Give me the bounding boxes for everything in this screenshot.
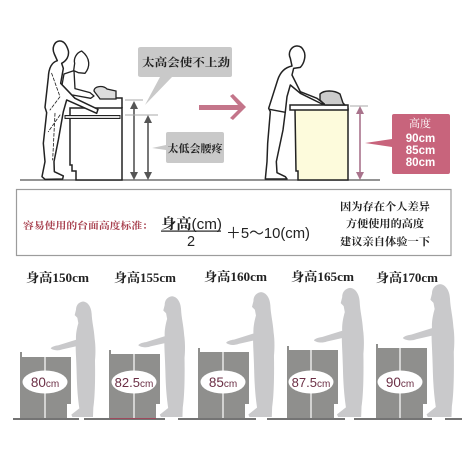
column: 160cm [198, 292, 274, 418]
callout: too low: 太低会腰疼 [168, 142, 223, 155]
column: 155cm [109, 296, 185, 418]
formula: ＋5～10(cm) [226, 225, 310, 242]
height labels: 身高155cm [114, 270, 177, 285]
chart: cabinet and figure comparison [13, 284, 462, 419]
column: 150cm: 80cm [31, 375, 59, 390]
formula: 2 [187, 234, 195, 250]
formula label: 容易使用的台面高度标准： [23, 220, 153, 232]
height labels: 身高160cm [204, 269, 268, 284]
callout: too high [138, 47, 232, 105]
column: 155cm: 82.5cm [115, 375, 153, 390]
figure: person at correct height [265, 46, 324, 179]
arrow: counter height dimension [356, 106, 364, 180]
height labels: 身高165cm [291, 269, 355, 284]
icon: right faucet and sink [320, 91, 345, 105]
height labels: 身高170cm [376, 270, 439, 285]
column: 170cm: 90cm [386, 375, 414, 390]
note text: 建议亲自体验一下 [340, 235, 431, 248]
formula [161, 215, 310, 250]
formula: 身高(cm) [161, 215, 222, 233]
height labels [26, 269, 439, 285]
figure: taller person [42, 41, 98, 179]
arrow: low counter dimension [144, 115, 152, 180]
column: 165cm [287, 288, 364, 418]
callout: height options: 90cm [406, 133, 435, 145]
floor line: top diagrams [20, 179, 380, 181]
callout: height options [365, 114, 450, 174]
callout: height options: 高度 [409, 116, 431, 130]
note text: 方便使用的高度 [346, 217, 425, 230]
panel: formula box [16, 190, 451, 256]
figure: shorter person [62, 51, 94, 98]
note text: 因为存在个人差异 [340, 200, 431, 213]
column: 150cm [20, 301, 95, 418]
callout: too high: 太高会使不上劲 [142, 55, 230, 69]
icon: left faucet and sink [94, 87, 116, 99]
column: 160cm: 85cm [209, 375, 237, 390]
column: 165cm: 87.5cm [292, 375, 330, 390]
column: 170cm [376, 284, 454, 418]
cabinet: left counter [65, 98, 122, 180]
diagram: posture at wrong counter heights [42, 41, 158, 180]
callout: height options: 85cm [406, 145, 435, 157]
arrow: pink transition arrow [199, 94, 246, 120]
callout: too low [152, 132, 224, 163]
height labels: 身高150cm [26, 270, 90, 285]
cabinet: cream counter [290, 105, 348, 180]
note text [340, 200, 431, 248]
arrow: high counter dimension [130, 101, 138, 180]
diagram: correct posture [265, 46, 368, 180]
callout: height options: 80cm [406, 157, 435, 169]
floor line [13, 418, 462, 420]
